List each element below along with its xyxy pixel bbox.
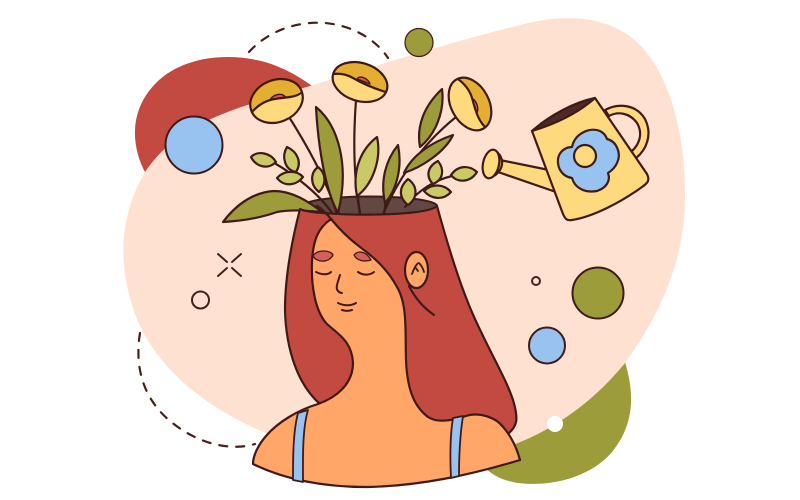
can rim	[532, 98, 595, 131]
can body	[532, 98, 648, 220]
circle: olive top	[405, 28, 433, 56]
can handle	[605, 106, 648, 158]
icon: cross sparkle	[218, 254, 241, 276]
circle: blue right	[529, 328, 565, 364]
watering can	[480, 98, 648, 220]
stem: left branch	[276, 164, 332, 213]
leaf: centre olive	[383, 145, 400, 203]
dashed arc: lower left	[138, 333, 255, 447]
strap: left	[293, 410, 308, 482]
hair: back	[285, 206, 516, 434]
flower: middle	[332, 60, 388, 104]
face: closed eyes, nose and mouth	[316, 272, 374, 311]
stem: middle flower	[354, 100, 360, 214]
stem: right flower	[383, 117, 456, 214]
can spout	[498, 160, 556, 192]
stem: right branch	[405, 176, 452, 207]
leaf: centre right	[356, 137, 378, 196]
circle: olive right	[572, 268, 624, 318]
strap: right	[450, 416, 463, 478]
circle: small outline left	[192, 292, 209, 308]
leaf: tall centre left	[316, 107, 343, 213]
plant: stems and leaves	[223, 89, 477, 222]
leaf: right branch lower	[424, 185, 451, 198]
spout rose	[489, 150, 502, 177]
blob: olive background	[478, 362, 631, 484]
flower: right	[448, 76, 492, 132]
skin: face, neck and shoulders	[253, 219, 520, 487]
can flower decoration	[558, 130, 619, 191]
circle: white dot	[547, 416, 563, 432]
leaf: left branch tip	[251, 153, 276, 167]
blob: peach background	[123, 18, 685, 461]
flower: left	[249, 78, 304, 124]
leaf: upper right	[419, 89, 443, 147]
illustration: woman with flowers growing from her head	[123, 18, 685, 488]
leaf: left branch lower	[277, 172, 303, 184]
leaf: small right lower	[401, 179, 416, 205]
leaf: right branch upper	[428, 161, 442, 184]
stem: inner stalks	[337, 190, 386, 215]
circle: small outline right	[532, 277, 540, 285]
leaf: left branch upper	[284, 147, 299, 172]
dashed arc: top	[249, 23, 388, 58]
leaf: large draped left	[223, 191, 322, 222]
circle: blue top left	[166, 116, 222, 174]
stem: left flower	[289, 117, 337, 214]
can flower centre	[574, 145, 596, 167]
head opening	[303, 196, 437, 216]
leaf: right branch tip	[451, 167, 477, 181]
hair strand over opening	[317, 206, 331, 219]
face: eyebrows	[313, 251, 371, 261]
ear	[405, 252, 434, 315]
leaf: long right	[404, 135, 453, 173]
blob: red background	[135, 57, 316, 174]
leaf: small left	[312, 167, 324, 192]
